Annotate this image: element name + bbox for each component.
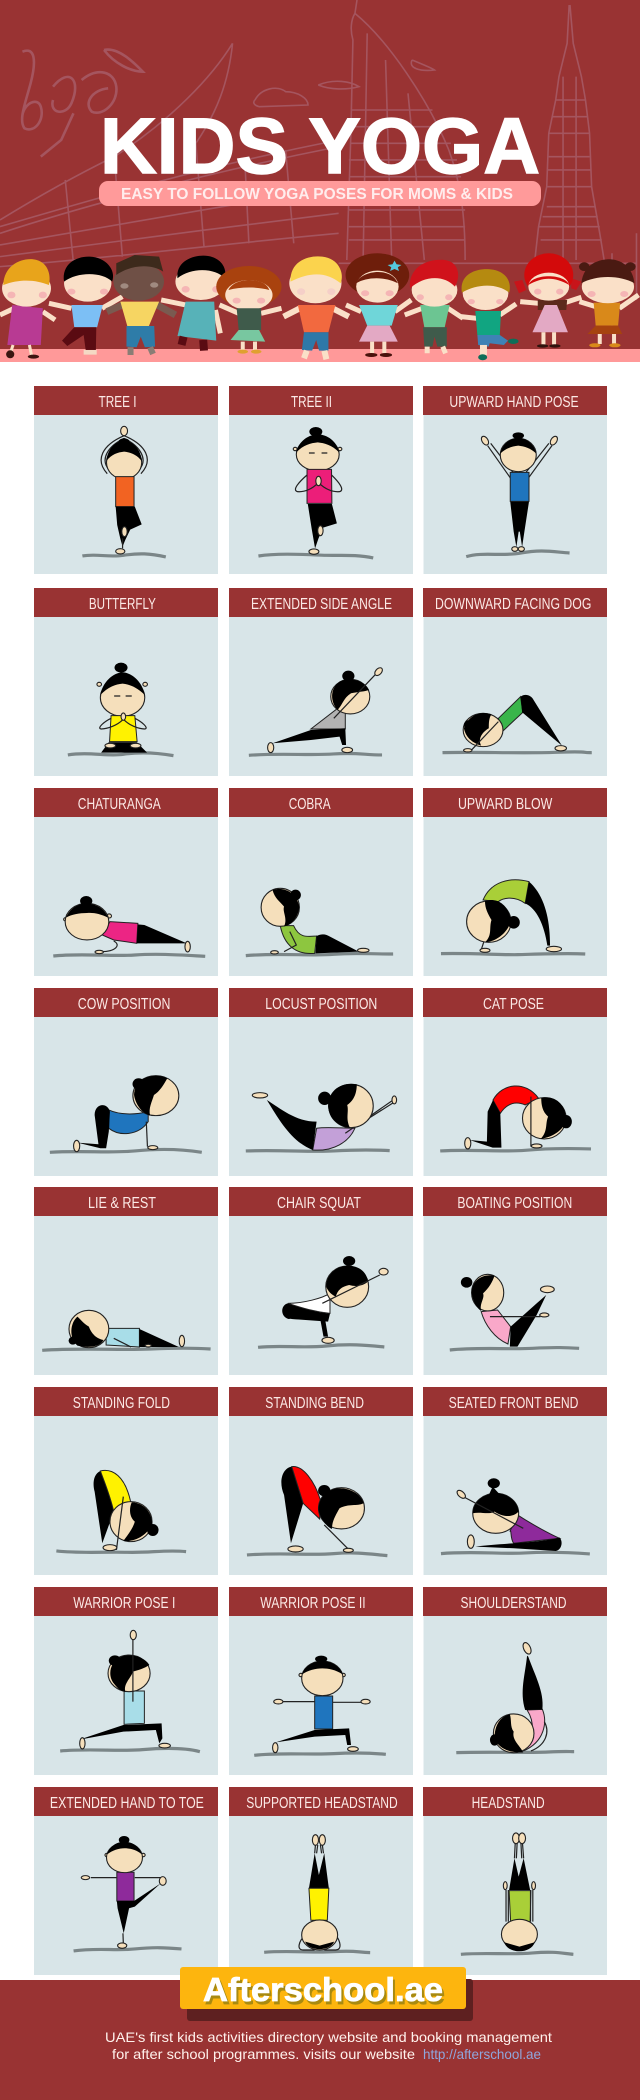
panel: Tree II	[229, 386, 413, 574]
heading: Headstand: HEADSTAND	[472, 1795, 545, 1812]
subtitle pill	[99, 181, 541, 206]
heading: Supported Headstand	[229, 1787, 413, 1816]
heading: Warrior Pose II	[229, 1587, 413, 1616]
heading: Tree I	[34, 386, 218, 415]
heading: Downward Facing Dog: DOWNWARD FACING DOG	[435, 596, 591, 613]
heading: Chaturanga: CHATURANGA	[78, 796, 161, 813]
heading: Warrior Pose II: WARRIOR POSE II	[260, 1595, 366, 1612]
figure: headstand	[461, 1833, 573, 1954]
heading: Extended Side Angle	[229, 588, 413, 617]
footer description: UAE's first kids activities directory website and booking management	[105, 2029, 552, 2045]
figure: tree pose with arms overhead	[82, 426, 166, 557]
heading: Extended Hand to Toe	[34, 1787, 218, 1816]
panel: Extended Side Angle	[229, 588, 413, 776]
heading: Cow Position	[34, 988, 218, 1017]
heading: Upward Hand Pose: UPWARD HAND POSE	[449, 394, 579, 411]
panel: Chaturanga	[34, 788, 218, 976]
heading: Supported Headstand: SUPPORTED HEADSTAND	[246, 1795, 398, 1812]
heading: Tree II	[229, 386, 413, 415]
figure: boat pose	[450, 1274, 579, 1350]
figure: shoulderstand	[456, 1642, 574, 1753]
panel: Upward Hand Pose	[423, 386, 607, 574]
heading: Extended Hand to Toe: EXTENDED HAND TO TOE	[50, 1795, 204, 1812]
panel: Tree I	[34, 386, 218, 574]
heading: Standing Fold: STANDING FOLD	[73, 1395, 170, 1412]
figure: chaturanga	[53, 896, 205, 956]
heading: Upward Hand Pose	[423, 386, 607, 415]
pink ground band	[0, 349, 640, 362]
panel: Warrior Pose I	[34, 1587, 218, 1775]
panel: Chair Squat	[229, 1187, 413, 1375]
heading: Seated Front Bend: SEATED FRONT BEND	[449, 1395, 578, 1412]
panel: Supported Headstand	[229, 1787, 413, 1975]
panel: hero banner	[0, 0, 640, 362]
heading: Locust Position: LOCUST POSITION	[265, 996, 377, 1013]
heading: Upward Blow: UPWARD BLOW	[458, 796, 553, 813]
panel: Cat Pose	[423, 988, 607, 1176]
footer description	[105, 2029, 552, 2062]
figure: warrior I	[60, 1630, 200, 1752]
panel: Standing Fold	[34, 1387, 218, 1575]
title: KIDS YOGA	[100, 101, 540, 190]
heading: Boating Position: BOATING POSITION	[457, 1195, 572, 1212]
heading: Standing Bend	[229, 1387, 413, 1416]
heading: Butterfly: BUTTERFLY	[89, 596, 156, 613]
figure: seated forward bend	[441, 1478, 590, 1554]
heading: Chair Squat	[229, 1187, 413, 1216]
heading: Shoulderstand: SHOULDERSTAND	[460, 1595, 566, 1612]
heading: Tree I: TREE I	[98, 394, 136, 411]
heading: Standing Bend: STANDING BEND	[265, 1395, 364, 1412]
heading: Tree II: TREE II	[291, 394, 332, 411]
panel: Seated Front Bend	[423, 1387, 607, 1575]
figure: cobra	[246, 888, 393, 956]
panel: Upward Blow	[423, 788, 607, 976]
panel: Downward Facing Dog	[423, 588, 607, 776]
panel: Standing Bend	[229, 1387, 413, 1575]
heading: Headstand	[423, 1787, 607, 1816]
heading: Warrior Pose I	[34, 1587, 218, 1616]
figure: butterfly seated pose	[68, 663, 173, 756]
heading: Boating Position	[423, 1187, 607, 1216]
figure: supported headstand	[264, 1835, 370, 1953]
heading: Lie and Rest	[34, 1187, 218, 1216]
heading: Cobra: COBRA	[289, 796, 331, 813]
figure: chair squat	[258, 1256, 388, 1347]
heading: Standing Fold	[34, 1387, 218, 1416]
panel: Locust Position	[229, 988, 413, 1176]
figure: tree pose hands at chest	[258, 427, 373, 558]
heading: Chair Squat: CHAIR SQUAT	[277, 1195, 361, 1212]
heading: Warrior Pose I: WARRIOR POSE I	[73, 1595, 175, 1612]
heading: Cat Pose: CAT POSE	[483, 996, 544, 1013]
skyline illustration	[0, 0, 636, 333]
heading: Extended Side Angle: EXTENDED SIDE ANGLE	[251, 596, 392, 613]
footer description: for after school programmes. visits our website	[112, 2046, 415, 2062]
figure: cat pose	[440, 1086, 591, 1151]
panel: Cobra	[229, 788, 413, 976]
heading: Cobra	[229, 788, 413, 817]
panel: Warrior Pose II	[229, 1587, 413, 1775]
panel: Butterfly	[34, 588, 218, 776]
subtitle pill: EASY TO FOLLOW YOGA POSES FOR MOMS & KIDS	[121, 186, 513, 203]
footer description: http://afterschool.ae	[423, 2046, 541, 2062]
figure: downward dog	[443, 695, 592, 753]
panel: footer	[0, 1967, 640, 2100]
figure: locust pose	[246, 1084, 397, 1151]
figure: extended hand to toe	[74, 1836, 181, 1951]
heading: Cow Position: COW POSITION	[78, 996, 170, 1013]
heading: Upward Blow	[423, 788, 607, 817]
logo badge: Afterschool.ae	[203, 1971, 443, 2008]
panel: Lie and Rest	[34, 1187, 218, 1375]
heading: Locust Position	[229, 988, 413, 1017]
heading: Butterfly	[34, 588, 218, 617]
heading: Lie and Rest: LIE & REST	[88, 1195, 156, 1212]
figure: standing forward fold	[56, 1470, 186, 1552]
figure: arms raised	[466, 432, 570, 557]
heading: Downward Facing Dog	[423, 588, 607, 617]
panel: Cow Position	[34, 988, 218, 1176]
panel: Extended Hand to Toe	[34, 1787, 218, 1975]
figure: extended side angle	[249, 667, 384, 755]
illustration: row of kids	[0, 253, 639, 360]
figure: lying pose	[42, 1310, 211, 1350]
heading: Shoulderstand	[423, 1587, 607, 1616]
heading: Chaturanga	[34, 788, 218, 817]
heading: Seated Front Bend	[423, 1387, 607, 1416]
panel: Boating Position	[423, 1187, 607, 1375]
heading: Cat Pose	[423, 988, 607, 1017]
logo badge	[180, 1967, 473, 2021]
figure: cow pose	[50, 1076, 202, 1152]
panel: Headstand	[423, 1787, 607, 1975]
figure: standing bend	[247, 1467, 387, 1556]
figure: warrior II	[254, 1656, 386, 1755]
figure: upward bow	[441, 880, 585, 955]
panel: Shoulderstand	[423, 1587, 607, 1775]
